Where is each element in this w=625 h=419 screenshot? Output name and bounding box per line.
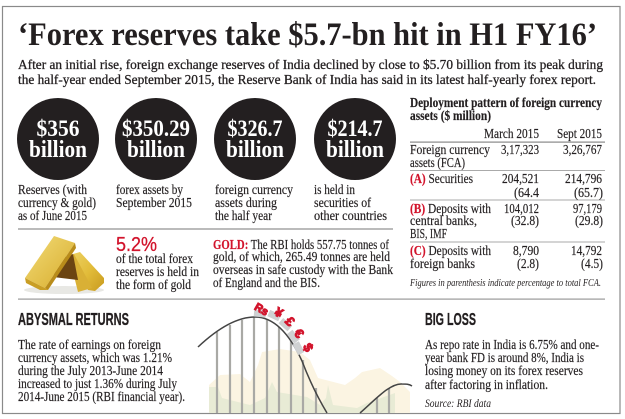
table column headers: March 2015 — [484, 126, 539, 141]
gold note: gold, of which, 265.49 tonnes are held — [213, 249, 390, 264]
row: FCA: 3,26,767 — [563, 142, 602, 157]
gold share: reserves is held in — [116, 264, 199, 279]
row: deposits with foreign banks: (4.5) — [581, 256, 603, 272]
table: deployment pattern — [409, 95, 605, 289]
text: abysmal returns: during the July 2013-June 2014 — [18, 363, 163, 378]
stat: $326.7 billion: foreign currency — [215, 182, 293, 197]
coaster cars with currency symbols: ¥ — [272, 304, 286, 321]
stat: $356 billion: $356 — [36, 116, 80, 141]
coaster cars with currency symbols: $ — [300, 341, 317, 355]
gold share: of the total forex — [116, 251, 193, 266]
row: deposits with foreign banks: 8,790 — [513, 243, 539, 258]
stat: $214.7 billion: securities of — [314, 195, 371, 210]
icon: gold bars — [24, 236, 104, 294]
stat: $326.7 billion: $326.7 — [228, 116, 282, 141]
table column headers — [484, 126, 602, 141]
stat: $356 billion: as of June 2015 — [18, 208, 87, 223]
stat: $356 billion: Reserves (with — [18, 182, 87, 198]
row: deposits with central banks: 97,179 — [573, 201, 602, 216]
intro text: the half-year ended September 2015, the Reserve Bank of India has said in its latest half-yearly forex report. — [18, 73, 596, 88]
table heading: assets ($ million) — [410, 108, 491, 124]
row: deposits with central banks: (32.8) — [511, 213, 539, 229]
coaster cars with currency symbols: £ — [282, 314, 298, 330]
row: securities: (A) Securities — [410, 171, 473, 187]
chart: roller coaster illustration — [198, 301, 412, 413]
text: big loss: losing money on its forex reserves — [425, 363, 583, 378]
gold note: GOLD: The RBI holds 557.75 tonnes of — [213, 237, 389, 252]
gold share: the form of gold — [116, 277, 191, 292]
text: abysmal returns: 2014-June 2015 (RBI financial year). — [18, 389, 185, 405]
table column headers: Sept 2015 — [557, 126, 602, 141]
source: Source: RBI data — [425, 396, 491, 410]
text: abysmal returns: currency assets, which was 1.21% — [18, 350, 172, 365]
stat: $350.29 billion: forex assets by — [116, 182, 183, 197]
stat: $356 billion: billion — [29, 137, 87, 163]
row: securities: 214,796 — [565, 171, 602, 186]
stat: $214.7 billion: $214.7 — [328, 116, 382, 141]
table heading — [410, 95, 602, 124]
gold share — [116, 234, 199, 292]
text: abysmal returns: The rate of earnings on foreign — [18, 337, 161, 352]
stat: $214.7 billion: other countries — [314, 208, 387, 223]
stat: $326.7 billion: assets during — [215, 195, 277, 210]
row: deposits with foreign banks: (2.8) — [517, 256, 539, 272]
row: FCA: Foreign currency — [410, 142, 490, 157]
text: big loss: year bank FD is around 8%, India is — [425, 350, 584, 365]
row: FCA: 3,17,323 — [501, 142, 539, 157]
row: deposits with central banks: (B) Deposits with — [410, 201, 491, 217]
row: deposits with foreign banks: foreign banks — [410, 256, 475, 271]
stat: $350.29 billion: September 2015 — [116, 195, 192, 210]
stat: $214.7 billion: is held in — [314, 182, 355, 197]
gold share: 5.2% — [116, 234, 157, 256]
stat: $326.7 billion: billion — [226, 137, 284, 163]
stat: $356 billion: currency & gold) — [18, 195, 96, 211]
row: securities: (65.7) — [574, 185, 603, 201]
row: deposits with central banks: BIS, IMF — [410, 226, 447, 241]
coaster cars with currency symbols: € — [291, 326, 307, 341]
text: big loss: after factoring in inflation. — [425, 377, 548, 392]
row: deposits with foreign banks — [410, 243, 603, 272]
intro text — [18, 58, 603, 88]
gold note — [213, 237, 393, 290]
text: abysmal returns: increased to just 1.36% during July — [18, 376, 177, 391]
row: deposits with foreign banks: (C) Deposits with — [410, 243, 491, 259]
row: securities: 204,521 — [502, 171, 539, 186]
row: securities: (64.4 — [514, 185, 539, 201]
stat: $326.7 billion: the half year — [215, 208, 272, 223]
row: deposits with foreign banks: 14,792 — [571, 243, 602, 258]
row: deposits with central banks: central banks, — [410, 213, 477, 228]
stat: $214.7 billion — [314, 98, 396, 223]
stat: $350.29 billion — [115, 98, 197, 210]
stat: $356 billion — [17, 98, 99, 223]
coaster cars with currency symbols: Rs — [252, 301, 270, 319]
gold note: overseas in safe custody with the Bank — [213, 262, 393, 277]
row: FCA — [410, 142, 602, 171]
heading: abysmal returns: ABYSMAL RETURNS — [18, 309, 129, 329]
text: big loss — [425, 337, 599, 392]
row: deposits with central banks: 104,012 — [504, 201, 539, 216]
intro text: After an initial rise, foreign exchange reserves of India declined by close to $5.70 billion from its peak during — [18, 58, 603, 73]
heading: big loss: BIG LOSS — [425, 309, 476, 329]
stat: $350.29 billion: billion — [127, 137, 185, 163]
stat: $326.7 billion — [214, 98, 296, 223]
row: FCA: assets (FCA) — [410, 155, 465, 171]
row: deposits with central banks — [410, 201, 603, 241]
stat: $350.29 billion: $350.29 — [122, 116, 190, 141]
stat: $214.7 billion: billion — [326, 137, 384, 163]
row: securities — [410, 171, 603, 201]
coaster cars with currency symbols — [252, 301, 317, 355]
row: deposits with central banks: (29.8) — [575, 213, 603, 229]
text: abysmal returns — [18, 337, 185, 405]
gold note: of England and the BIS. — [213, 275, 320, 290]
